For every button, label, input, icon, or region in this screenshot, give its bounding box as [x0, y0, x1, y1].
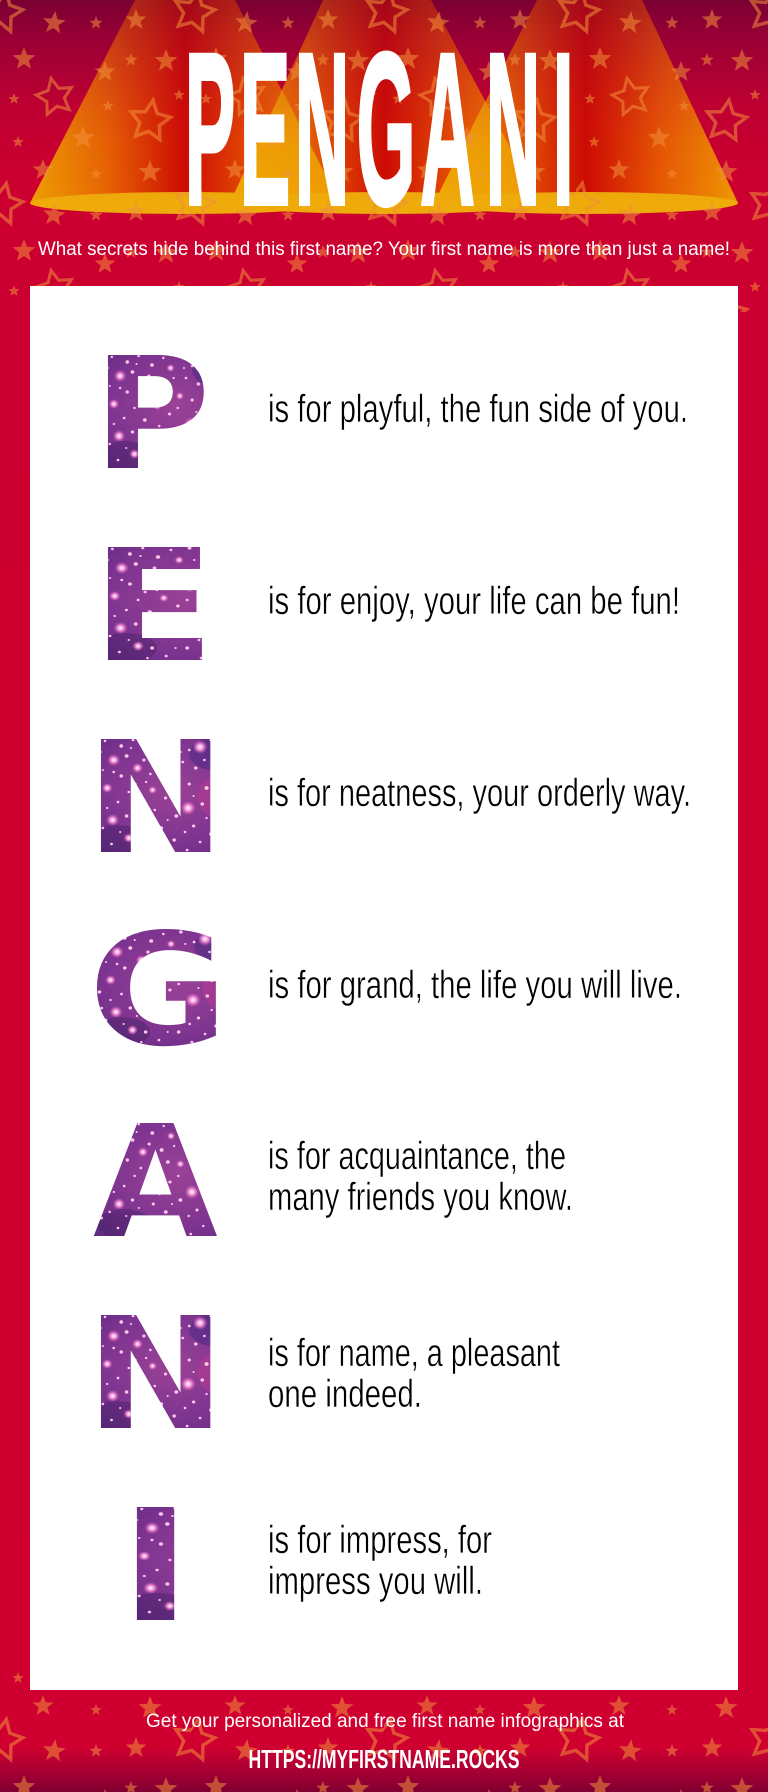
- row: P: [93, 325, 688, 505]
- letter E: E: [91, 516, 215, 697]
- footer text: Get your personalized and free first name infographics at: [146, 1711, 625, 1732]
- text: A lines: many friends you know.: [268, 1176, 573, 1219]
- letter N: N: [86, 709, 226, 889]
- letter N: N: [86, 1285, 226, 1465]
- subtitle: What secrets hide behind this first name? Your first name is more than just a name!: [38, 239, 730, 260]
- letter A: A: [93, 1093, 218, 1273]
- text: I lines: [268, 1519, 492, 1603]
- row: A: [93, 1093, 573, 1273]
- text: A lines: [268, 1135, 573, 1219]
- row: N: [86, 709, 691, 889]
- title: PENGANI: [185, 9, 574, 251]
- text: I lines: impress you will.: [268, 1560, 483, 1603]
- text: N lines: [268, 1332, 560, 1416]
- row: G: [88, 901, 682, 1081]
- text: I lines: is for impress, for: [268, 1519, 492, 1562]
- letter I: I: [119, 1476, 193, 1657]
- text: N lines: one indeed.: [268, 1373, 422, 1416]
- letter G: G: [88, 901, 228, 1081]
- text: N lines: is for name, a pleasant: [268, 1332, 560, 1375]
- main white panel: [30, 286, 738, 1690]
- row: I: [119, 1476, 492, 1657]
- row: E: [91, 516, 680, 697]
- letter P: P: [93, 325, 210, 505]
- spotlights: [30, 0, 738, 214]
- footer url: HTTPS://MYFIRSTNAME.ROCKS: [248, 1744, 520, 1774]
- text: A lines: is for acquaintance, the: [268, 1135, 566, 1178]
- row: N second: [86, 1285, 560, 1465]
